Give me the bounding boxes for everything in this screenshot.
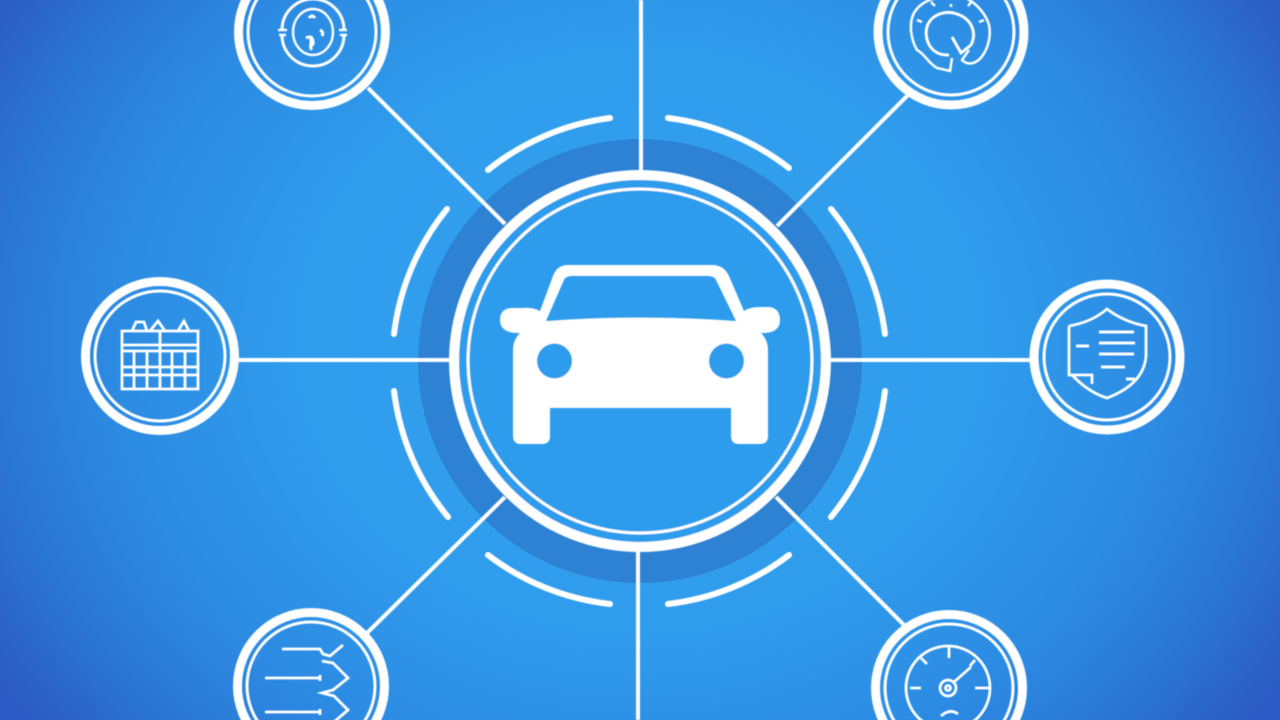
icon: spiky dial [911,0,990,71]
icon: speedometer [906,646,990,720]
node: bottom-left process branches [238,612,384,720]
node: bottom-right speedometer [876,614,1022,720]
center hub circle [454,175,826,547]
node: top-left cost cycle [238,0,386,106]
node: right shield document [1034,284,1180,430]
icon: car [500,265,780,444]
dark halo band [418,139,862,583]
connector lines [236,0,1032,720]
segmented outer arcs [394,118,885,604]
icon: shield document [1069,309,1146,398]
node: left calendar [86,282,234,430]
node: top-right performance dial [878,0,1024,105]
icon: branching lines [265,645,348,720]
icon: dollar cycle [278,0,347,66]
icon: calendar [122,321,198,389]
